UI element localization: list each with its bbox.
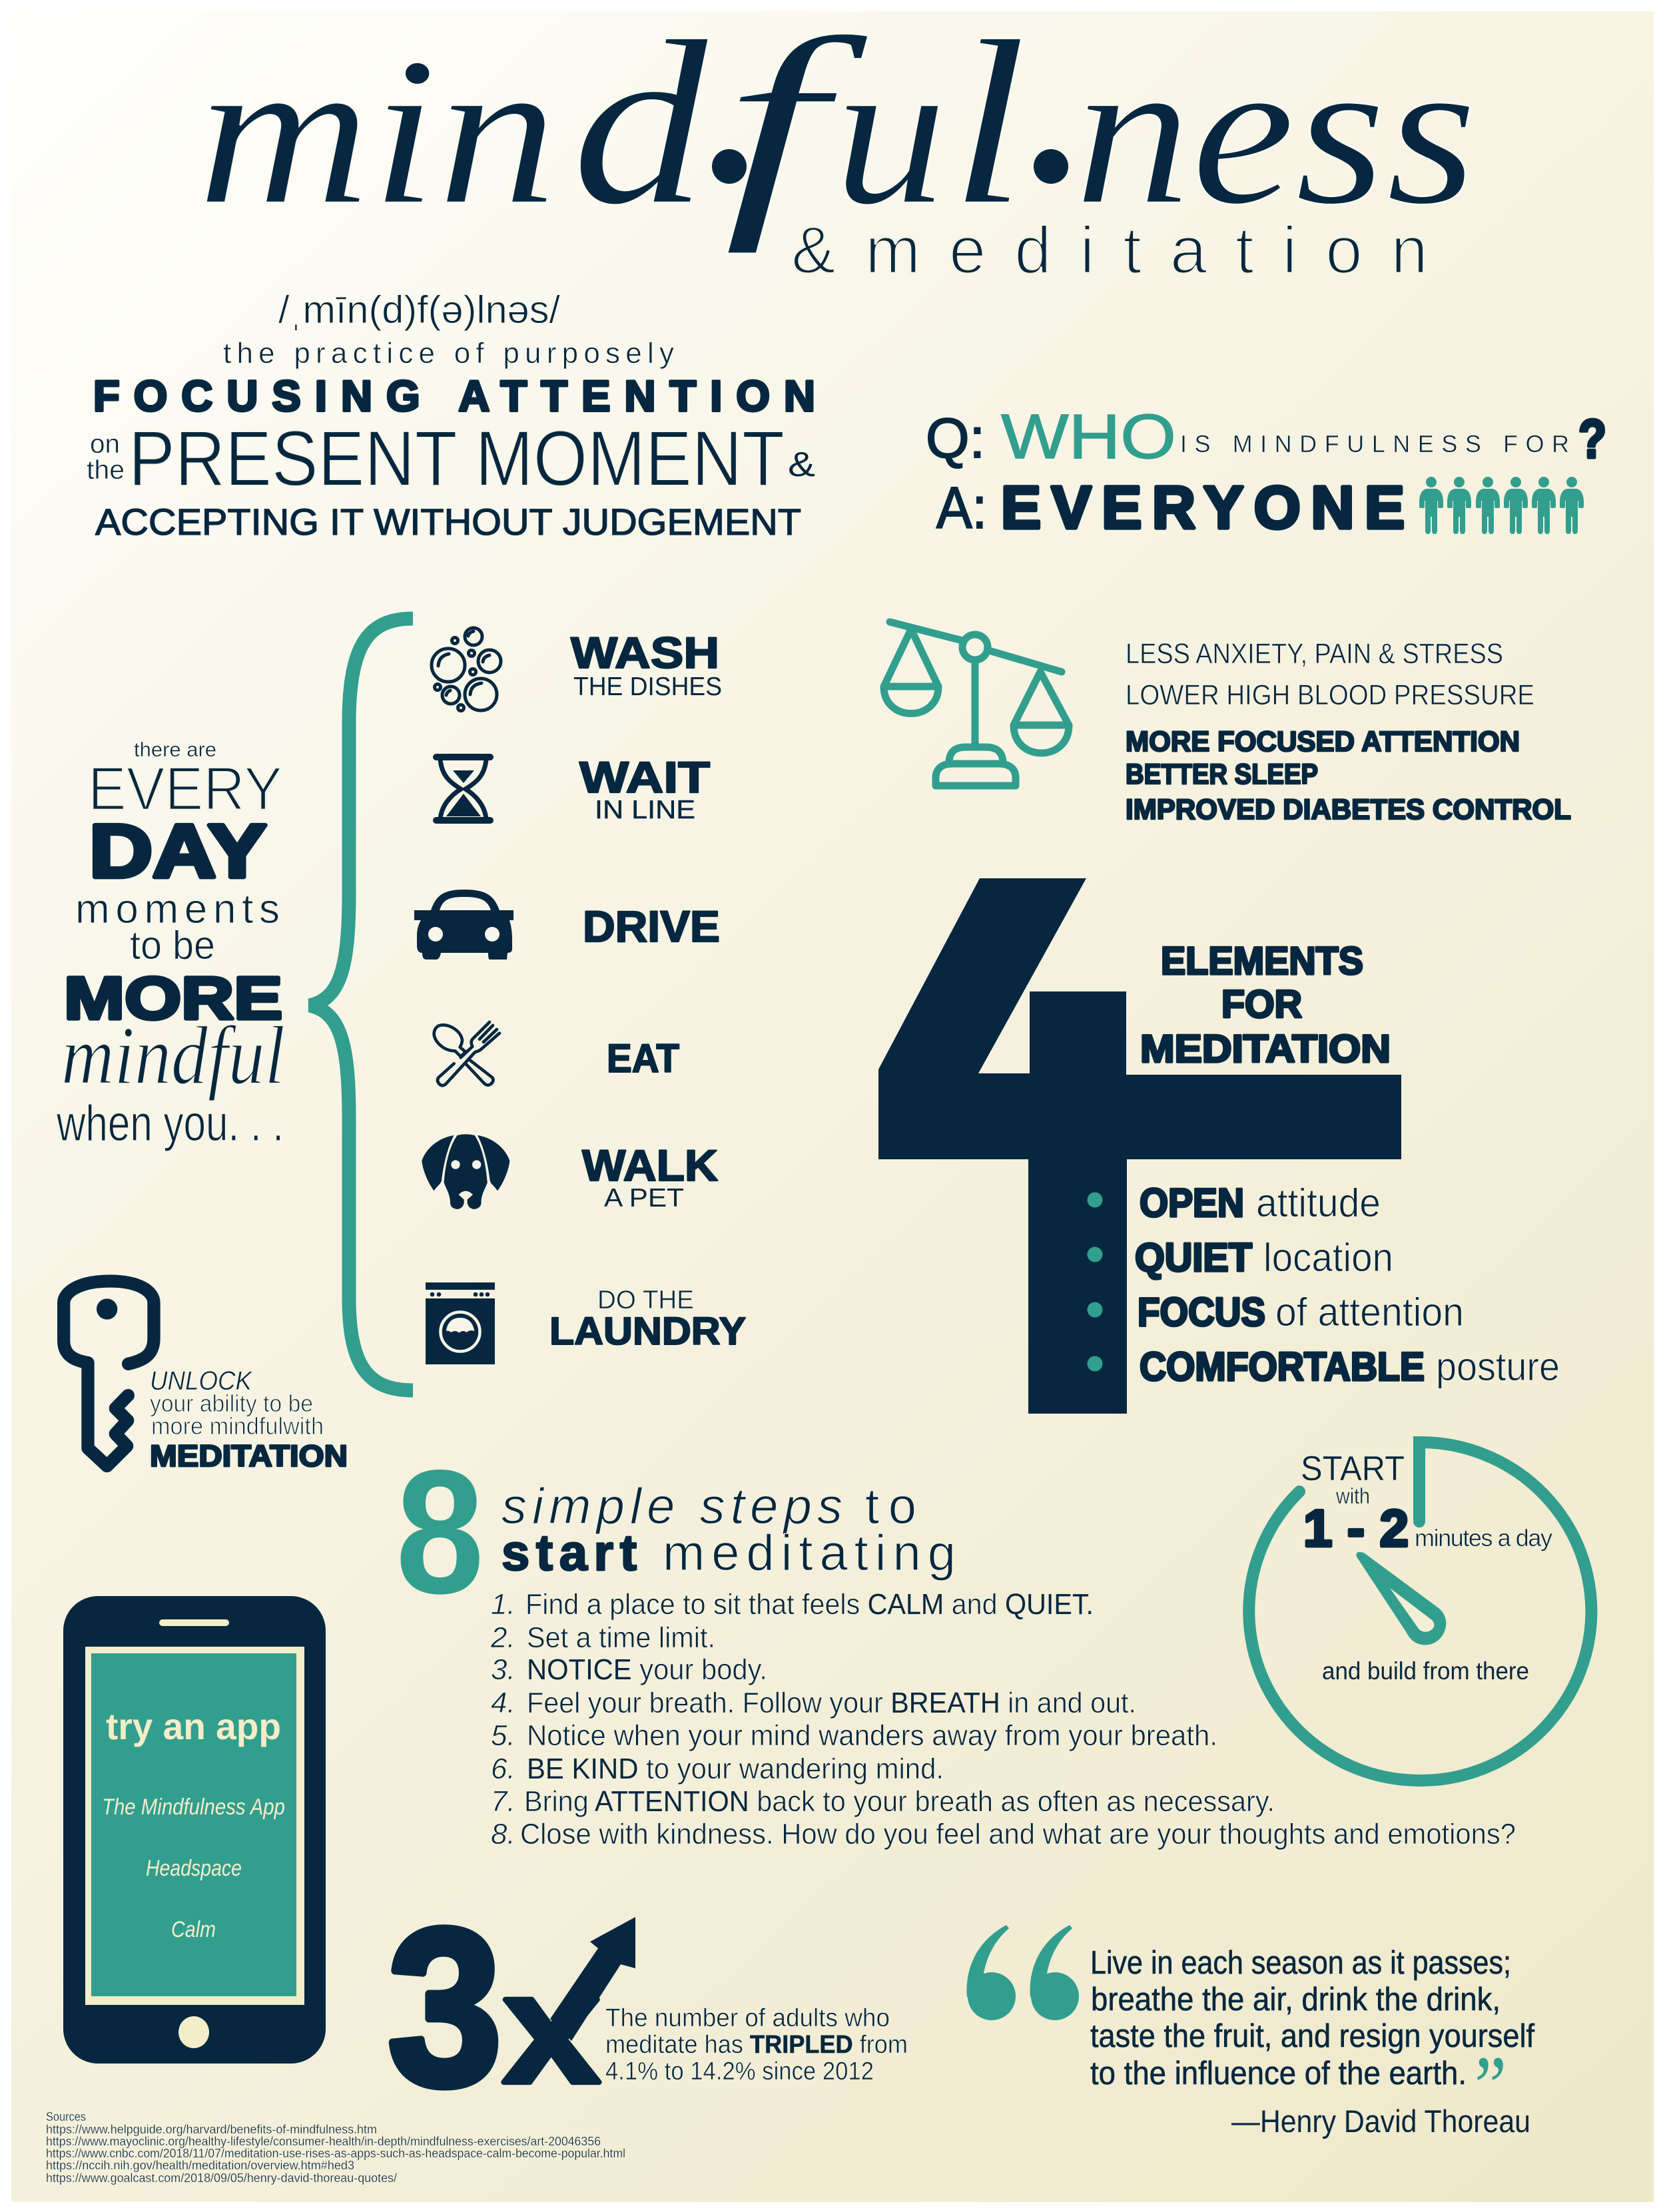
key text: your ability to be xyxy=(150,1390,313,1417)
everyday moments text: mindful xyxy=(61,1010,285,1102)
title: mindfulness: u xyxy=(834,14,947,248)
definition block: & xyxy=(788,445,815,484)
big number 4 xyxy=(878,878,1401,1414)
benefits list xyxy=(1126,638,1571,826)
sources: https://www.goalcast.com/2018/09/05/henry-david-thoreau-quotes/ xyxy=(46,2171,397,2185)
four elements list xyxy=(1135,1181,1560,1389)
who is mindfulness for: IS MINDFULNESS FOR xyxy=(1180,430,1569,457)
label: do the laundry xyxy=(549,1286,746,1353)
definition block: the xyxy=(87,455,125,485)
label: wait in line xyxy=(579,752,710,824)
everyday moments text: DAY xyxy=(89,809,266,893)
steps list: NOTICE your body. xyxy=(527,1653,767,1686)
title: mindfulness xyxy=(197,0,1477,255)
sources: https://www.helpguide.org/harvard/benefits-of-mindfulness.htm xyxy=(46,2123,377,2136)
benefits list: BETTER SLEEP xyxy=(1126,758,1318,790)
steps list: Find a place to sit that feels CALM and QUIET. xyxy=(525,1588,1094,1621)
subtitle: & meditation: & xyxy=(791,213,836,288)
label: walk a pet: WALK xyxy=(582,1141,718,1190)
icon: key xyxy=(64,1281,154,1466)
steps heading: meditating xyxy=(663,1525,956,1581)
quote text: ” xyxy=(1475,2039,1506,2135)
timer hand xyxy=(1356,1552,1446,1645)
four elements list: COMFORTABLE xyxy=(1140,1344,1425,1389)
steps list: Close with kindness. How do you feel and what are your thoughts and emotions? xyxy=(520,1818,1516,1850)
benefits list: MORE FOCUSED ATTENTION xyxy=(1126,726,1520,758)
everyday moments text: MORE xyxy=(64,966,282,1032)
elements heading xyxy=(1140,940,1391,1071)
four elements list: QUIET xyxy=(1135,1235,1252,1280)
quote text: Live in each season as it passes; xyxy=(1090,1945,1511,1981)
quote text: to the influence of the earth. xyxy=(1090,2056,1467,2091)
definition block: the practice of purposely xyxy=(223,337,674,370)
sources: https://www.cnbc.com/2018/11/07/meditation-use-rises-as-apps-such-as-headspace-calm-become-popular.html xyxy=(46,2147,625,2160)
timer text: START xyxy=(1301,1450,1405,1488)
who is mindfulness for: WHO xyxy=(1001,402,1176,472)
sources: https://www.mayoclinic.org/healthy-lifestyle/consumer-health/in-depth/mindfulness-exercises/art-20046356 xyxy=(46,2135,601,2148)
label: wait in line: IN LINE xyxy=(595,796,695,824)
elements heading: MEDITATION xyxy=(1140,1027,1391,1071)
sources: Sources xyxy=(46,2110,86,2123)
four elements list: location xyxy=(1263,1235,1393,1280)
elements heading: FOR xyxy=(1221,983,1302,1026)
who is mindfulness for: ? xyxy=(1578,409,1606,469)
four elements list: FOCUS xyxy=(1138,1290,1265,1334)
steps list: 5. xyxy=(491,1719,515,1752)
everyday moments text: moments xyxy=(75,886,280,932)
everyday moments text: to be xyxy=(130,923,215,968)
key text: UNLOCK xyxy=(150,1366,253,1396)
quote text: taste the fruit, and resign yourself xyxy=(1090,2018,1534,2054)
steps list: Notice when your mind wanders away from your breath. xyxy=(527,1719,1217,1752)
elements heading: ELEMENTS xyxy=(1161,940,1363,983)
steps list: 7. xyxy=(491,1785,515,1818)
big number 8: 8 xyxy=(396,1434,484,1631)
steps list: 1. xyxy=(491,1588,515,1621)
steps list: BE KIND to your wandering mind. xyxy=(527,1753,944,1785)
four elements list: OPEN xyxy=(1140,1181,1244,1225)
benefits list: LESS ANXIETY, PAIN & STRESS xyxy=(1126,638,1503,670)
four elements list: attitude xyxy=(1256,1181,1381,1225)
steps list: Bring ATTENTION back to your breath as often as necessary. xyxy=(524,1785,1275,1818)
sources: https://nccih.nih.gov/health/meditation/overview.htm#hed3 xyxy=(46,2159,354,2172)
icon: big opening quotation mark xyxy=(967,1925,1079,2020)
key text: MEDITATION xyxy=(150,1439,348,1473)
label: drive: DRIVE xyxy=(583,902,720,951)
who is mindfulness for: EVERYONE xyxy=(1001,475,1405,541)
everyday moments text xyxy=(56,738,285,1152)
timer text: with xyxy=(1335,1484,1370,1508)
steps heading: simple steps xyxy=(501,1478,842,1535)
key text xyxy=(150,1366,348,1473)
timer text: 1 - 2 xyxy=(1303,1499,1409,1557)
label: wash the dishes: WASH xyxy=(571,628,719,677)
label: eat: EAT xyxy=(607,1036,679,1081)
steps list: Feel your breath. Follow your BREATH in and out. xyxy=(527,1687,1136,1719)
tripled stat text xyxy=(605,2004,908,2085)
icon: spoon and fork xyxy=(434,1022,500,1085)
3x with arrow xyxy=(388,1882,635,2131)
everyday moments text: EVERY xyxy=(88,755,282,823)
who is mindfulness for xyxy=(926,402,1606,541)
icon: car xyxy=(414,890,513,960)
steps list: 2. xyxy=(490,1621,515,1654)
definition block xyxy=(87,288,815,543)
definition block: on xyxy=(90,429,120,459)
timer ring xyxy=(1249,1442,1591,1781)
icon: dog xyxy=(422,1134,509,1209)
label: walk a pet xyxy=(582,1141,718,1213)
phone with app list: try an app xyxy=(106,1705,281,1747)
label: do the laundry: DO THE xyxy=(597,1286,694,1314)
icon: scales xyxy=(884,622,1069,786)
definition block: FOCUSING ATTENTION xyxy=(93,372,815,420)
bullet dots xyxy=(1087,1192,1103,1372)
phone with app list: The Mindfulness App xyxy=(102,1795,285,1820)
steps list: Set a time limit. xyxy=(527,1621,715,1654)
four elements list: posture xyxy=(1436,1344,1560,1389)
timer text: and build from there xyxy=(1322,1657,1529,1685)
title: mindfulness: ness xyxy=(1074,14,1477,248)
steps heading: start xyxy=(501,1525,637,1581)
definition block: PRESENT MOMENT xyxy=(129,415,785,503)
benefits list: LOWER HIGH BLOOD PRESSURE xyxy=(1126,679,1534,711)
steps list: 3. xyxy=(491,1653,515,1686)
steps list: 4. xyxy=(491,1687,515,1719)
label: do the laundry: LAUNDRY xyxy=(549,1310,746,1353)
timer text: minutes a day xyxy=(1415,1524,1552,1551)
steps heading: to xyxy=(865,1478,916,1535)
definition block: ACCEPTING IT WITHOUT JUDGEMENT xyxy=(95,501,801,543)
phone with app list xyxy=(63,1596,326,2064)
icon: hourglass xyxy=(433,754,494,824)
tripled stat text: 4.1% to 14.2% since 2012 xyxy=(605,2058,874,2085)
icon: six people xyxy=(1419,477,1584,534)
steps heading xyxy=(501,1478,956,1581)
label: wash the dishes xyxy=(571,628,722,701)
tripled stat text: meditate has TRIPLED from xyxy=(605,2031,908,2059)
icon: washing machine xyxy=(426,1282,495,1364)
3x with arrow: 3 xyxy=(388,1882,502,2131)
quote text: breathe the air, drink the drink, xyxy=(1091,1982,1500,2018)
who is mindfulness for: A: xyxy=(936,475,987,541)
brace xyxy=(310,619,413,1390)
3x with arrow: x xyxy=(503,1940,600,2115)
icon: bubbles xyxy=(432,628,501,711)
definition block: /ˌmīn(d)f(ə)lnəs/ xyxy=(278,288,561,332)
steps list: 6. xyxy=(491,1753,515,1785)
who is mindfulness for: Q: xyxy=(926,407,985,469)
four elements list: of attention xyxy=(1275,1290,1464,1334)
everyday moments text: there are xyxy=(134,738,216,761)
label: walk a pet: A PET xyxy=(604,1184,684,1213)
phone with app list: Calm xyxy=(171,1917,216,1942)
tripled stat text: The number of adults who xyxy=(605,2004,890,2032)
timer text xyxy=(1301,1450,1552,1685)
phone with app list: Headspace xyxy=(146,1856,242,1881)
quote text: —Henry David Thoreau xyxy=(1231,2103,1530,2139)
benefits list: IMPROVED DIABETES CONTROL xyxy=(1126,794,1571,826)
label: wash the dishes: THE DISHES xyxy=(573,673,722,701)
title: mindfulness: min xyxy=(197,14,557,248)
everyday moments text: when you. . . xyxy=(56,1095,284,1152)
quote text xyxy=(1090,1945,1534,2139)
key text: more mindfulwith xyxy=(151,1412,324,1440)
sources xyxy=(46,2110,625,2185)
steps list xyxy=(490,1588,1516,1850)
steps list: 8. xyxy=(491,1818,515,1850)
subtitle: & meditation: meditation xyxy=(865,213,1428,288)
label: wait in line: WAIT xyxy=(579,752,710,802)
